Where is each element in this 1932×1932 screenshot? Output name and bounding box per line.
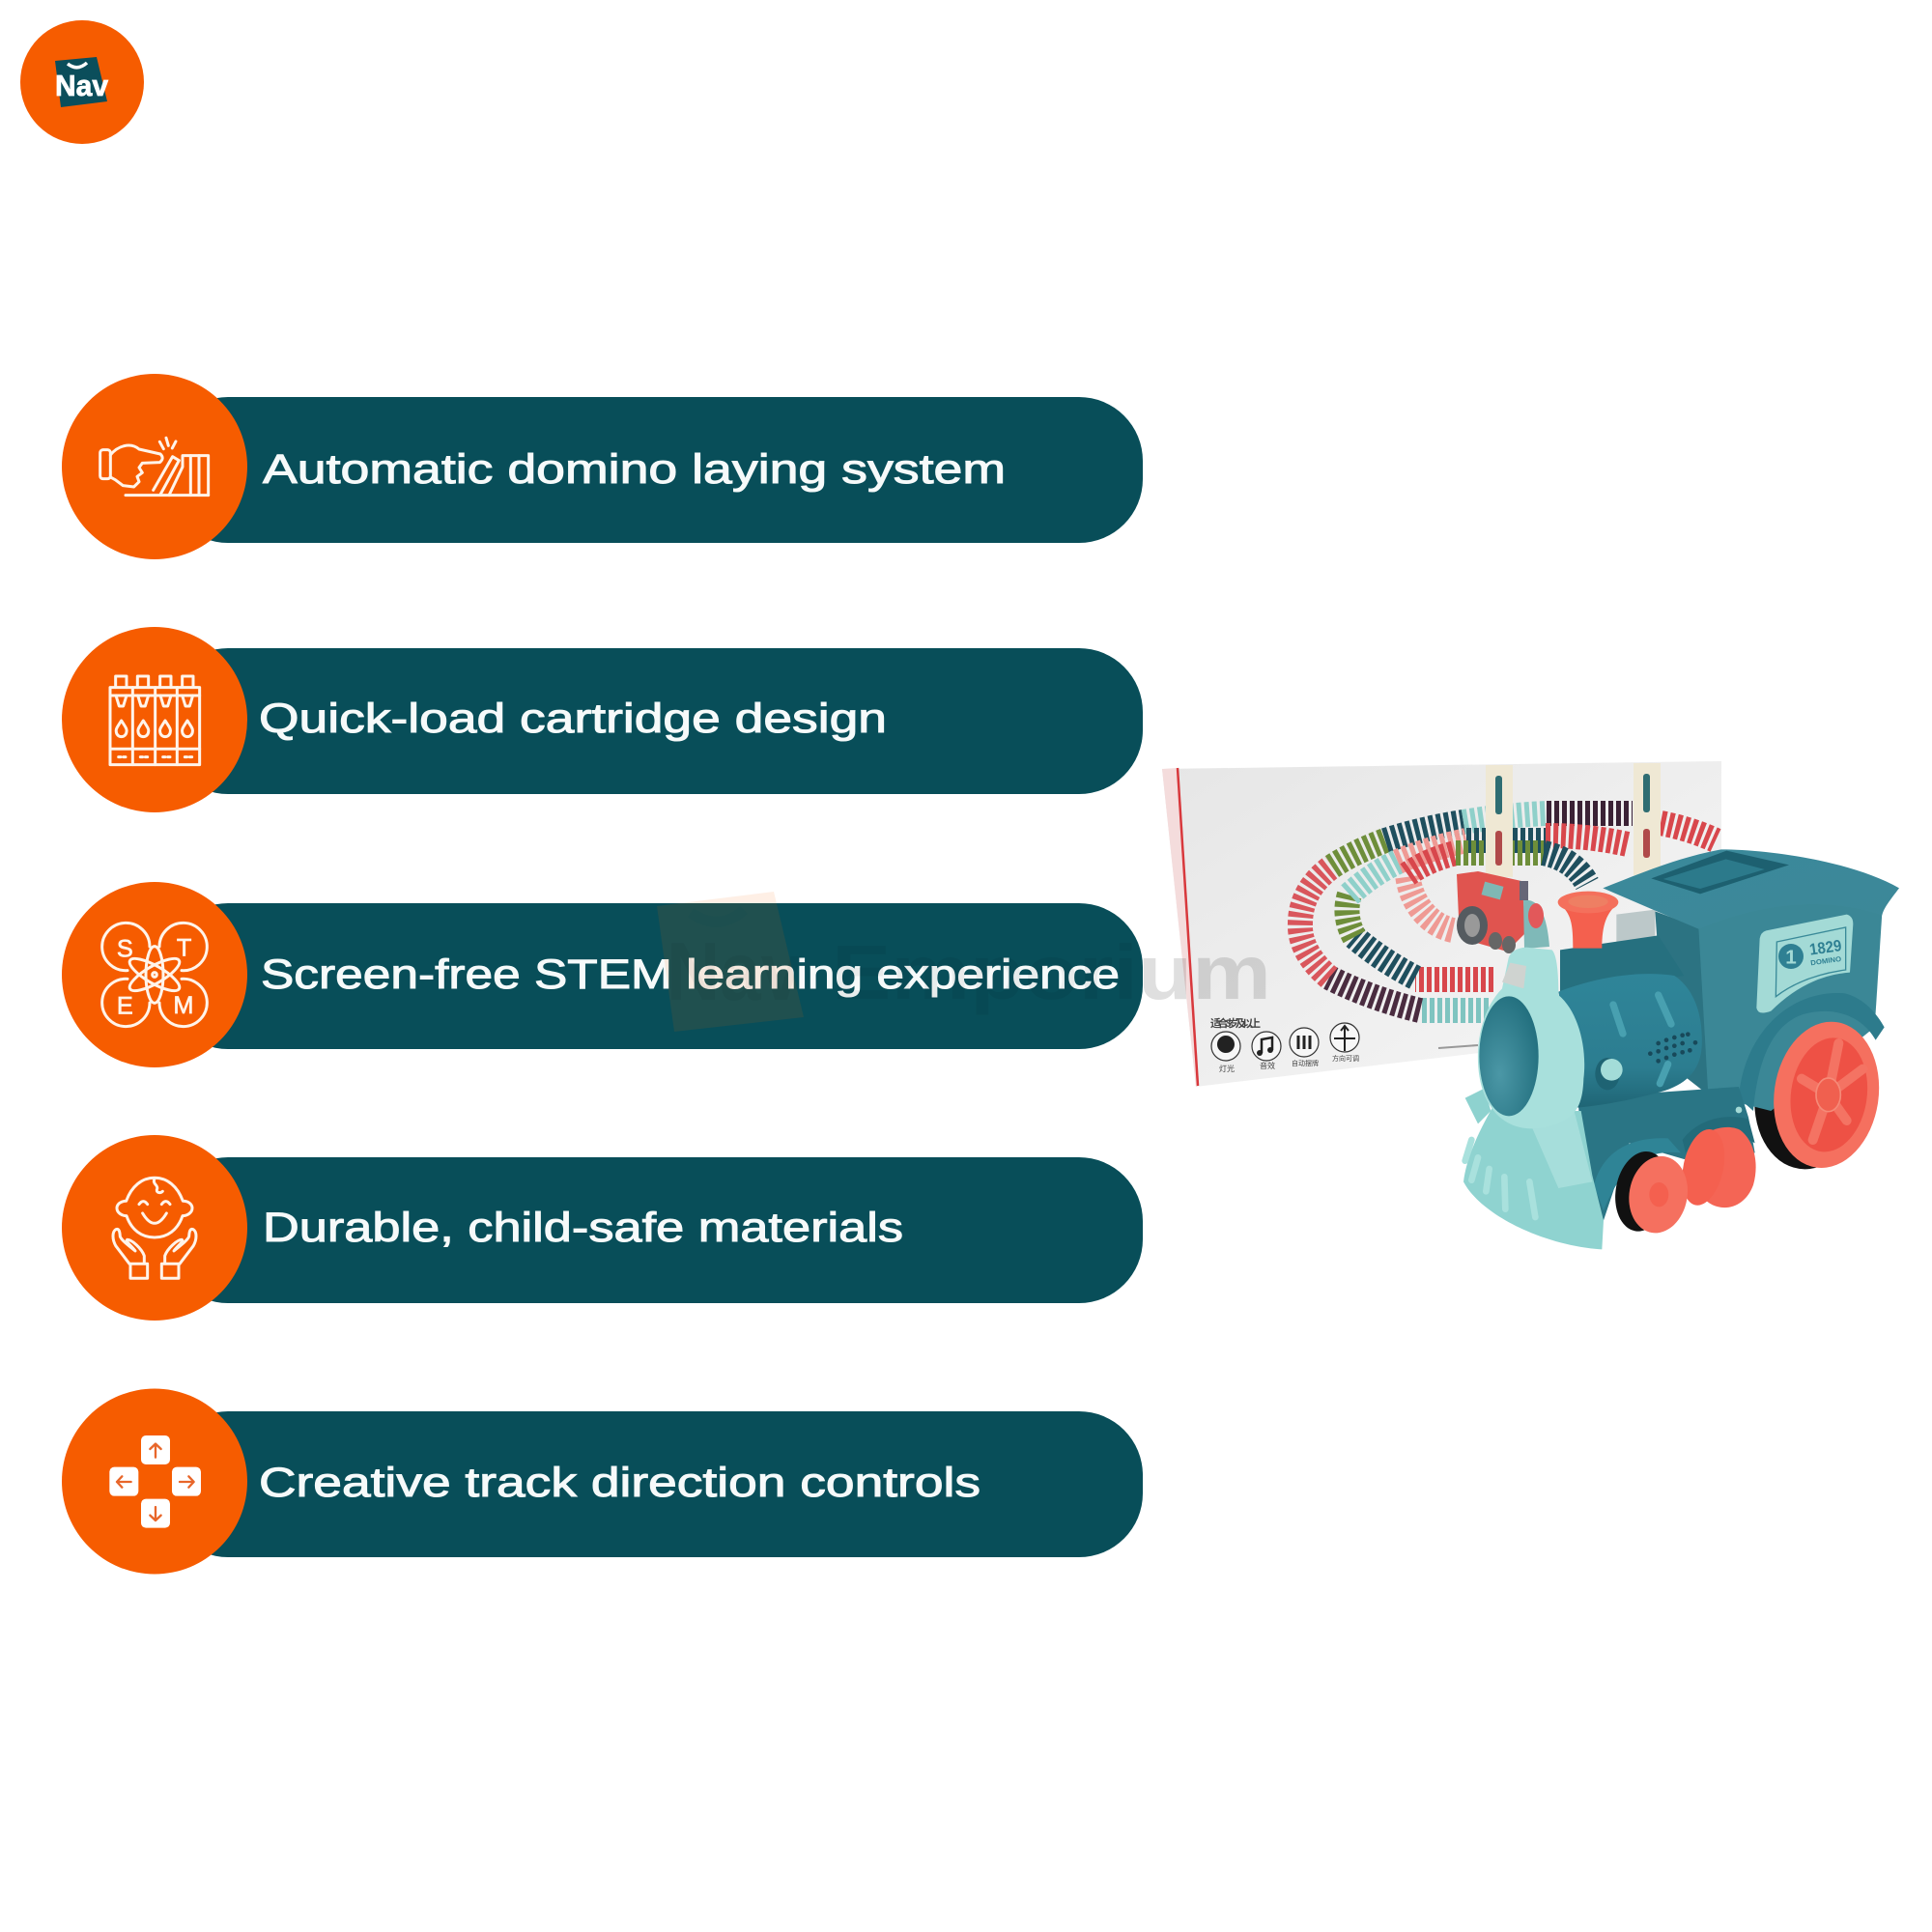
box feature icons and labels: 灯光 xyxy=(1219,1064,1235,1073)
feature row 3: STEM learning: T xyxy=(177,935,191,962)
feature row 3: STEM learning: M xyxy=(173,992,194,1019)
domino rings on box xyxy=(1300,813,1716,1010)
watermark: Emporium xyxy=(832,929,1271,1015)
number plate: DOMINO xyxy=(1810,954,1842,967)
chassis xyxy=(1577,1087,1755,1220)
box feature icons and labels: 自动摆牌 xyxy=(1292,1059,1319,1067)
big rear wheel tyre xyxy=(1745,1013,1874,1177)
big wheel disc xyxy=(1765,1015,1889,1175)
watermark xyxy=(657,892,1271,1032)
number plate xyxy=(1756,915,1853,1013)
cab xyxy=(1603,849,1899,1111)
watermark: Nav xyxy=(667,926,802,1018)
feature row 5: track direction controls xyxy=(62,1389,1143,1575)
feature row 1: automatic domino laying xyxy=(62,374,1143,559)
cowcatcher xyxy=(1463,1089,1604,1249)
pillars on box xyxy=(1486,763,1661,877)
feature row 1: automatic domino laying: Automatic domino laying system xyxy=(263,446,1006,493)
box feature icons and labels: 适合3岁及以上 xyxy=(1210,1016,1261,1030)
locomotive toy xyxy=(1463,849,1899,1249)
box feature icons and labels xyxy=(1210,1016,1478,1073)
small wheels xyxy=(1609,1125,1756,1237)
chimney xyxy=(1558,892,1618,949)
boiler xyxy=(1558,935,1702,1108)
feature row 3: STEM learning xyxy=(62,882,1143,1067)
number plate: 1829 xyxy=(1808,936,1843,959)
logo badge: Nav xyxy=(55,69,109,102)
box feature icons and labels: 方向可调 xyxy=(1332,1054,1359,1063)
logo badge xyxy=(20,20,144,144)
feature row 4: child-safe materials xyxy=(62,1135,1143,1321)
feature row 5: track direction controls: Creative track direction controls xyxy=(259,1460,980,1506)
headlight housing xyxy=(1478,948,1584,1128)
feature row 3: STEM learning: S xyxy=(117,935,133,962)
feature row 2: quick-load cartridge: Quick-load cartridge design xyxy=(259,696,887,742)
infographic canvas xyxy=(20,20,1899,1575)
box feature icons and labels: 音效 xyxy=(1260,1061,1275,1070)
feature row 3: STEM learning: E xyxy=(117,993,133,1020)
feature row 2: quick-load cartridge xyxy=(62,627,1143,812)
mini red train on box xyxy=(1457,871,1549,953)
feature row 4: child-safe materials: Durable, child-safe materials xyxy=(263,1205,903,1251)
watermark: Emporium xyxy=(832,929,1271,1015)
number plate: 1 xyxy=(1785,946,1797,968)
feature row 3: STEM learning: Screen-free STEM learning experience xyxy=(261,952,1120,998)
product box xyxy=(1162,761,1721,1087)
wheel arch xyxy=(1739,993,1885,1111)
